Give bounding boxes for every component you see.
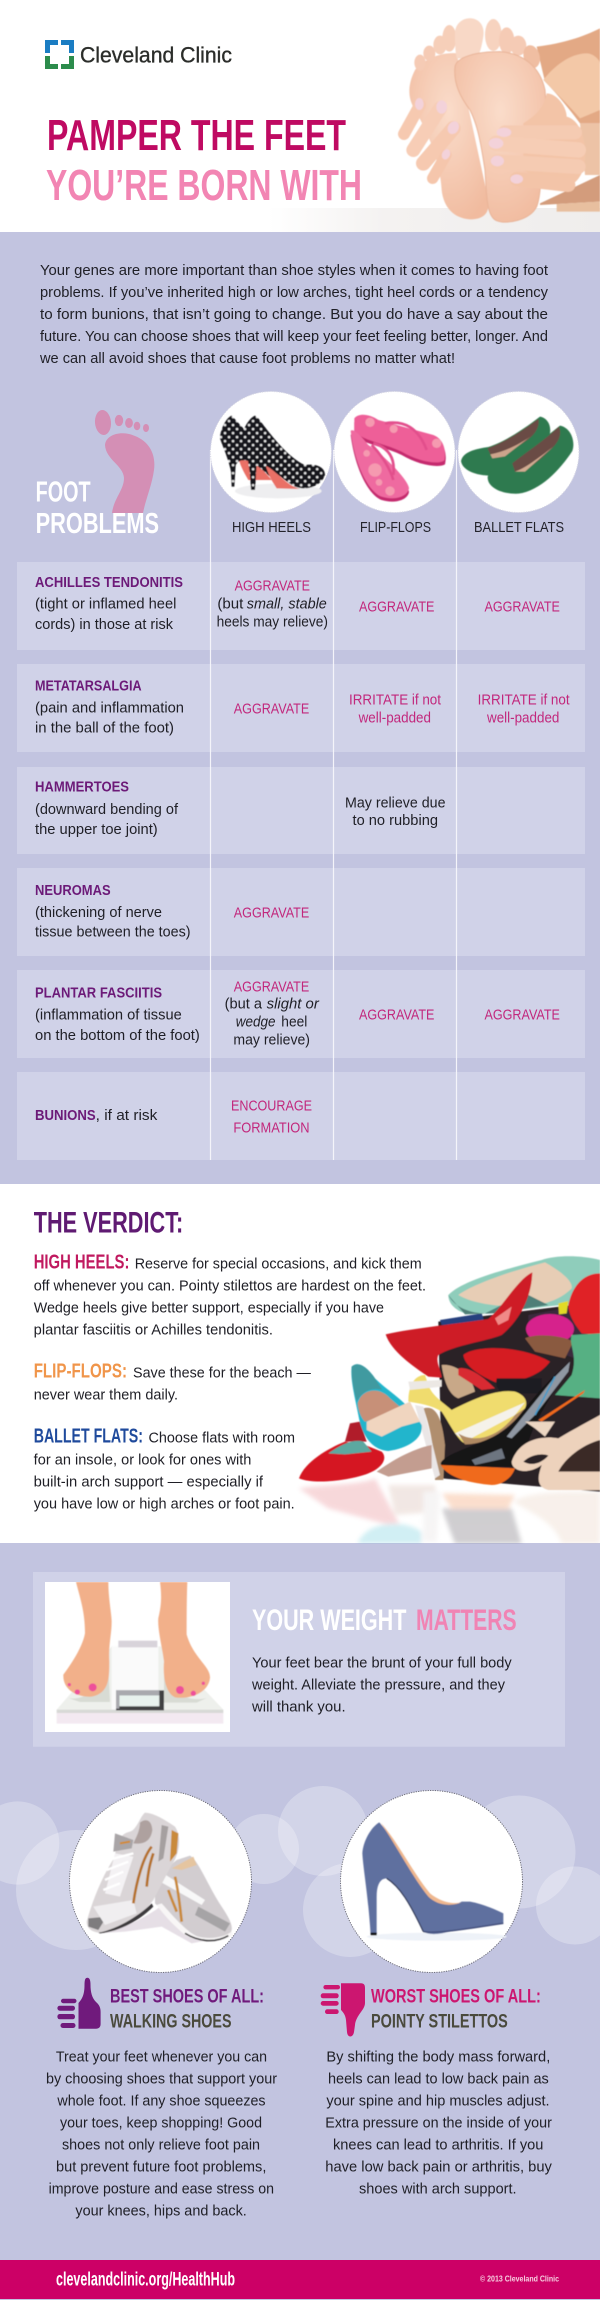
footer: © 2013 Cleveland Clinic (480, 2274, 559, 2284)
intro paragraph: we can all avoid shoes that cause foot problems no matter what! (39, 351, 455, 367)
text: weight: weight. Alleviate the pressure, and they (251, 1677, 506, 1693)
icon: thumbs up (57, 1978, 101, 2029)
text: best shoes: improve posture and ease stress on (49, 2181, 274, 2197)
row: plantar fasciitis (35, 979, 560, 1049)
row: plantar fasciitis: slight or (267, 997, 320, 1013)
row: achilles tendonitis: AGGRAVATE (235, 579, 310, 595)
heading: worst shoes (371, 1986, 541, 2033)
text: best shoes: but prevent future foot problems, (56, 2159, 266, 2175)
row: bunions: , if at risk (96, 1108, 158, 1124)
logo: Cleveland Clinic: Cleveland Clinic (80, 42, 232, 68)
intro paragraph: problems. If you’ve inherited high or low arches, tight heel cords or a tendency (40, 285, 549, 301)
text: ballet flats verdict: Choose flats with room (148, 1430, 295, 1446)
row: hammertoes: HAMMERTOES (35, 780, 129, 796)
row: metatarsalgia: METATARSALGIA (35, 679, 142, 695)
text: weight: will thank you. (251, 1699, 346, 1715)
row: achilles tendonitis: heels may relieve) (217, 615, 328, 631)
footer: clevelandclinic.org/HealthHub (56, 2270, 235, 2291)
icon: high heels (210, 392, 332, 512)
text: worst shoes: have low back pain or arthritis, buy (325, 2159, 553, 2175)
row: plantar fasciitis: (but a (225, 997, 263, 1013)
row: plantar fasciitis: (inflammation of tissue (35, 1008, 182, 1024)
panel: your weight matters (33, 1572, 565, 1747)
heading: best shoes: BEST SHOES OF ALL: (110, 1986, 264, 2008)
text: best shoes: shoes not only relieve foot pain (62, 2137, 260, 2153)
text: ballet flats verdict: built-in arch support — especially if (34, 1474, 264, 1490)
text: high heels verdict (34, 1251, 426, 1338)
row: plantar fasciitis: AGGRAVATE (234, 979, 309, 995)
row: achilles tendonitis: ACHILLES TENDONITIS (35, 575, 183, 591)
text: best shoes: Treat your feet whenever you can (56, 2049, 267, 2065)
text: flip-flops verdict: FLIP-FLOPS: (34, 1360, 127, 1382)
photo: pointy stiletto (340, 1790, 522, 1972)
text: high heels verdict: HIGH HEELS: (34, 1251, 129, 1273)
column labels (232, 519, 564, 536)
row: plantar fasciitis: AGGRAVATE (359, 1008, 435, 1024)
text: worst shoes: shoes with arch support. (359, 2181, 517, 2197)
heading: worst shoes: POINTY STILETTOS (371, 2011, 508, 2033)
text: weight (251, 1655, 512, 1715)
text: flip-flops verdict (34, 1360, 311, 1403)
panel: the verdict (0, 1184, 600, 1544)
text: ballet flats verdict (34, 1425, 295, 1512)
title: YOU’RE BORN WITH (46, 161, 362, 210)
photo: walking shoes (70, 1790, 252, 1972)
title (46, 111, 362, 210)
row: bunions: ENCOURAGE (231, 1098, 312, 1114)
row: achilles tendonitis: (tight or inflamed heel (35, 597, 176, 613)
text: high heels verdict: off whenever you can. Pointy stilettos are hardest on the feet. (34, 1278, 426, 1294)
text: worst shoes: Extra pressure on the inside of your (325, 2115, 552, 2131)
heading: your weight matters: YOUR WEIGHT (252, 1604, 406, 1637)
row: metatarsalgia: IRRITATE if not (478, 692, 570, 708)
heading: foot problems: FOOT (36, 477, 91, 509)
bokeh circles (0, 1786, 600, 1957)
panel: best shoes (46, 1790, 277, 2219)
logo: Cleveland Clinic (45, 40, 232, 69)
icon: thumbs down (321, 1983, 365, 2036)
text: worst shoes: knees can lead to arthritis. If you (333, 2137, 543, 2153)
text: worst shoes: heels can lead to low back pain as (328, 2071, 549, 2087)
row: metatarsalgia: AGGRAVATE (234, 702, 309, 718)
row: achilles tendonitis (35, 575, 560, 633)
row: hammertoes: the upper toe joint) (35, 822, 158, 838)
panel: worst shoes (321, 1790, 553, 2197)
text: best shoes: your toes, keep shopping! Good (60, 2115, 262, 2131)
icon: ballet flats (458, 392, 579, 512)
text: high heels verdict: plantar fasciitis or Achilles tendonitis. (34, 1322, 273, 1338)
row: neuromas (35, 883, 309, 941)
heading: worst shoes: WORST SHOES OF ALL: (371, 1986, 541, 2008)
heading: best shoes: WALKING SHOES (110, 2011, 232, 2033)
row: hammertoes: (downward bending of (35, 802, 179, 818)
heading: your weight matters: MATTERS (416, 1604, 517, 1637)
row: metatarsalgia: well-padded (358, 711, 431, 727)
photo: pile of shoes (299, 1256, 600, 1544)
row: metatarsalgia: (pain and inflammation (35, 701, 184, 717)
column labels: FLIP-FLOPS (360, 519, 431, 536)
text: ballet flats verdict: you have low or high arches or foot pain. (34, 1496, 295, 1512)
column labels: HIGH HEELS (232, 519, 311, 536)
text: worst shoes: By shifting the body mass forward, (326, 2049, 550, 2065)
table panel: foot problems (17, 392, 585, 1160)
row: metatarsalgia: well-padded (486, 711, 559, 727)
heading: the verdict: THE VERDICT: (34, 1206, 183, 1239)
row: achilles tendonitis: AGGRAVATE (359, 599, 435, 615)
text: worst shoes (325, 2049, 553, 2197)
row: hammertoes: to no rubbing (352, 813, 438, 829)
row: hammertoes (35, 780, 446, 838)
table rows (17, 562, 585, 1160)
towel (268, 208, 600, 232)
row: bunions: FORMATION (233, 1120, 310, 1136)
text: weight: Your feet bear the brunt of your full body (252, 1655, 512, 1671)
text: high heels verdict: Wedge heels give better support, especially if you have (34, 1301, 384, 1317)
text: high heels verdict: Reserve for special occasions, and kick them (135, 1256, 422, 1272)
row: plantar fasciitis: on the bottom of the foot) (35, 1028, 200, 1044)
intro paragraph: to form bunions, that isn’t going to change. But you do have a say about the (40, 307, 548, 323)
row: neuromas: NEUROMAS (35, 883, 111, 899)
text: best shoes: whole foot. If any shoe squeezes (56, 2093, 266, 2109)
row: achilles tendonitis: cords) in those at risk (35, 617, 174, 633)
row: neuromas: AGGRAVATE (234, 906, 309, 922)
row: achilles tendonitis: small, stable (247, 597, 327, 613)
row: plantar fasciitis: wedge (236, 1015, 276, 1031)
row: hammertoes: May relieve due (345, 795, 446, 811)
row: bunions (35, 1098, 312, 1136)
text: best shoes: your knees, hips and back. (75, 2203, 247, 2219)
row: bunions: BUNIONS (35, 1108, 96, 1124)
intro paragraph: Your genes are more important than shoe styles when it comes to having foot (40, 263, 548, 279)
heading: foot problems: PROBLEMS (36, 508, 159, 540)
photo: feet held by hands (404, 18, 600, 222)
row: plantar fasciitis: heel (281, 1015, 307, 1031)
text: best shoes (46, 2049, 277, 2219)
intro paragraph (39, 263, 549, 367)
text: ballet flats verdict: BALLET FLATS: (34, 1425, 143, 1447)
row: plantar fasciitis: PLANTAR FASCIITIS (35, 986, 162, 1002)
text: best shoes: by choosing shoes that support your (46, 2071, 277, 2087)
footer (0, 2260, 600, 2299)
column labels: BALLET FLATS (474, 519, 564, 536)
row: plantar fasciitis: AGGRAVATE (484, 1008, 560, 1024)
header (0, 0, 600, 232)
icon: footprint (94, 409, 154, 513)
row: plantar fasciitis: may relieve) (233, 1033, 310, 1049)
heading: foot problems (36, 477, 159, 540)
title: PAMPER THE FEET (47, 111, 346, 160)
intro paragraph: future. You can choose shoes that will keep your feet feeling better, longer. And (40, 329, 548, 345)
row: metatarsalgia: in the ball of the foot) (35, 721, 174, 737)
text: flip-flops verdict: Save these for the beach — (133, 1365, 311, 1381)
text: ballet flats verdict: for an insole, or look for ones with (34, 1452, 251, 1468)
row: metatarsalgia: IRRITATE if not (349, 692, 441, 708)
reflection (299, 1478, 600, 1544)
row: neuromas: (thickening of nerve (35, 905, 162, 921)
text: flip-flops verdict: never wear them daily. (34, 1387, 178, 1403)
row: metatarsalgia (35, 679, 570, 737)
icon: flip-flops (334, 392, 455, 512)
row: achilles tendonitis: (but (217, 597, 243, 613)
photo: feet on a scale (45, 1582, 230, 1732)
text: worst shoes: your spine and hip muscles adjust. (326, 2093, 550, 2109)
row: achilles tendonitis: AGGRAVATE (484, 599, 560, 615)
heading: best shoes (110, 1986, 264, 2033)
row: neuromas: tissue between the toes) (35, 925, 191, 941)
